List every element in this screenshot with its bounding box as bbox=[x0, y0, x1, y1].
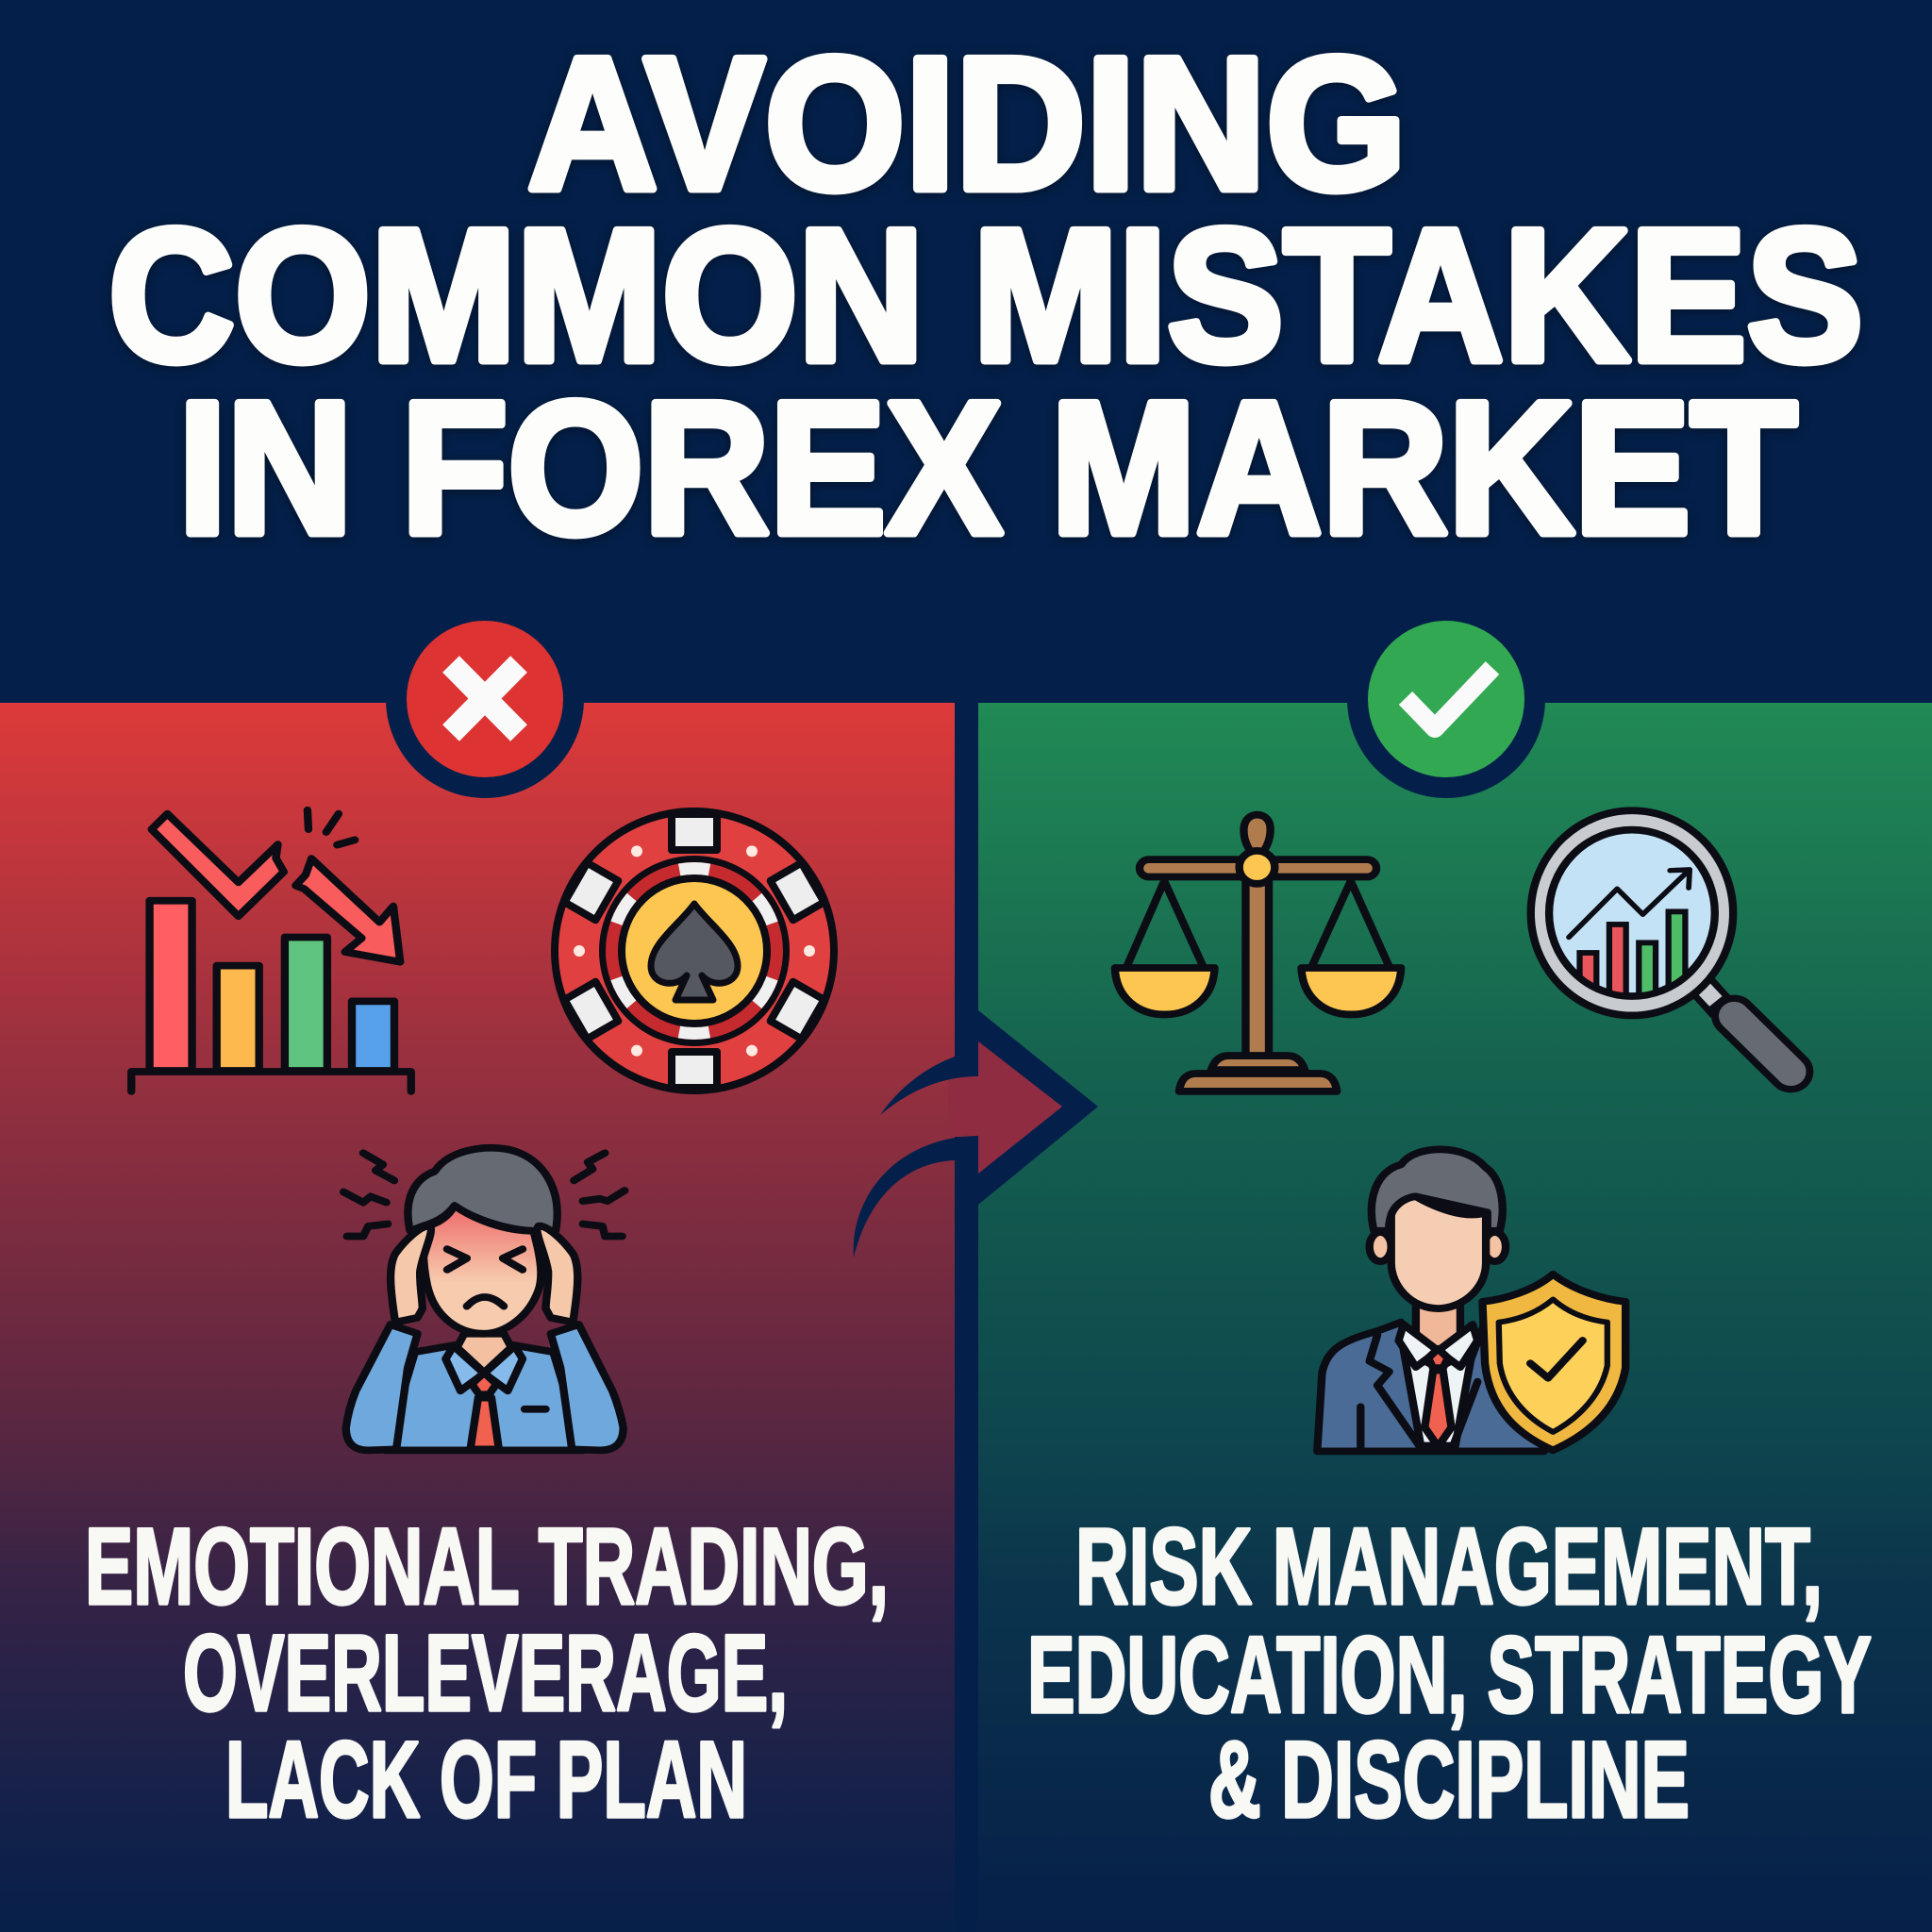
title: AVOIDING bbox=[527, 19, 1407, 229]
caption: mistakes: EMOTIONAL TRADING, bbox=[85, 1507, 889, 1627]
icon: magnifier over chart bbox=[1531, 810, 1790, 1072]
icon: green check badge bbox=[1347, 600, 1545, 798]
caption: solutions: & DISCIPLINE bbox=[1208, 1720, 1690, 1840]
panel: mistakes bbox=[0, 703, 955, 1932]
caption: mistakes: LACK OF PLAN bbox=[225, 1720, 747, 1840]
caption: solutions bbox=[1027, 1507, 1872, 1840]
arrow: from mistakes to solutions bbox=[854, 1010, 1098, 1257]
icon: red cross badge bbox=[386, 600, 584, 798]
title bbox=[108, 19, 1863, 574]
title: IN FOREX MARKET bbox=[178, 363, 1797, 574]
icon: falling bar chart with broken arrow bbox=[131, 810, 411, 1091]
panel: solutions bbox=[978, 703, 1932, 1932]
caption: mistakes: OVERLEVERAGE, bbox=[183, 1613, 788, 1734]
icon: businessman with shield bbox=[1317, 1149, 1625, 1451]
icon: stressed trader bbox=[343, 1148, 625, 1450]
icon: balance scale bbox=[1115, 815, 1401, 1091]
caption: mistakes bbox=[85, 1507, 889, 1840]
icon: poker chip bbox=[555, 811, 834, 1091]
